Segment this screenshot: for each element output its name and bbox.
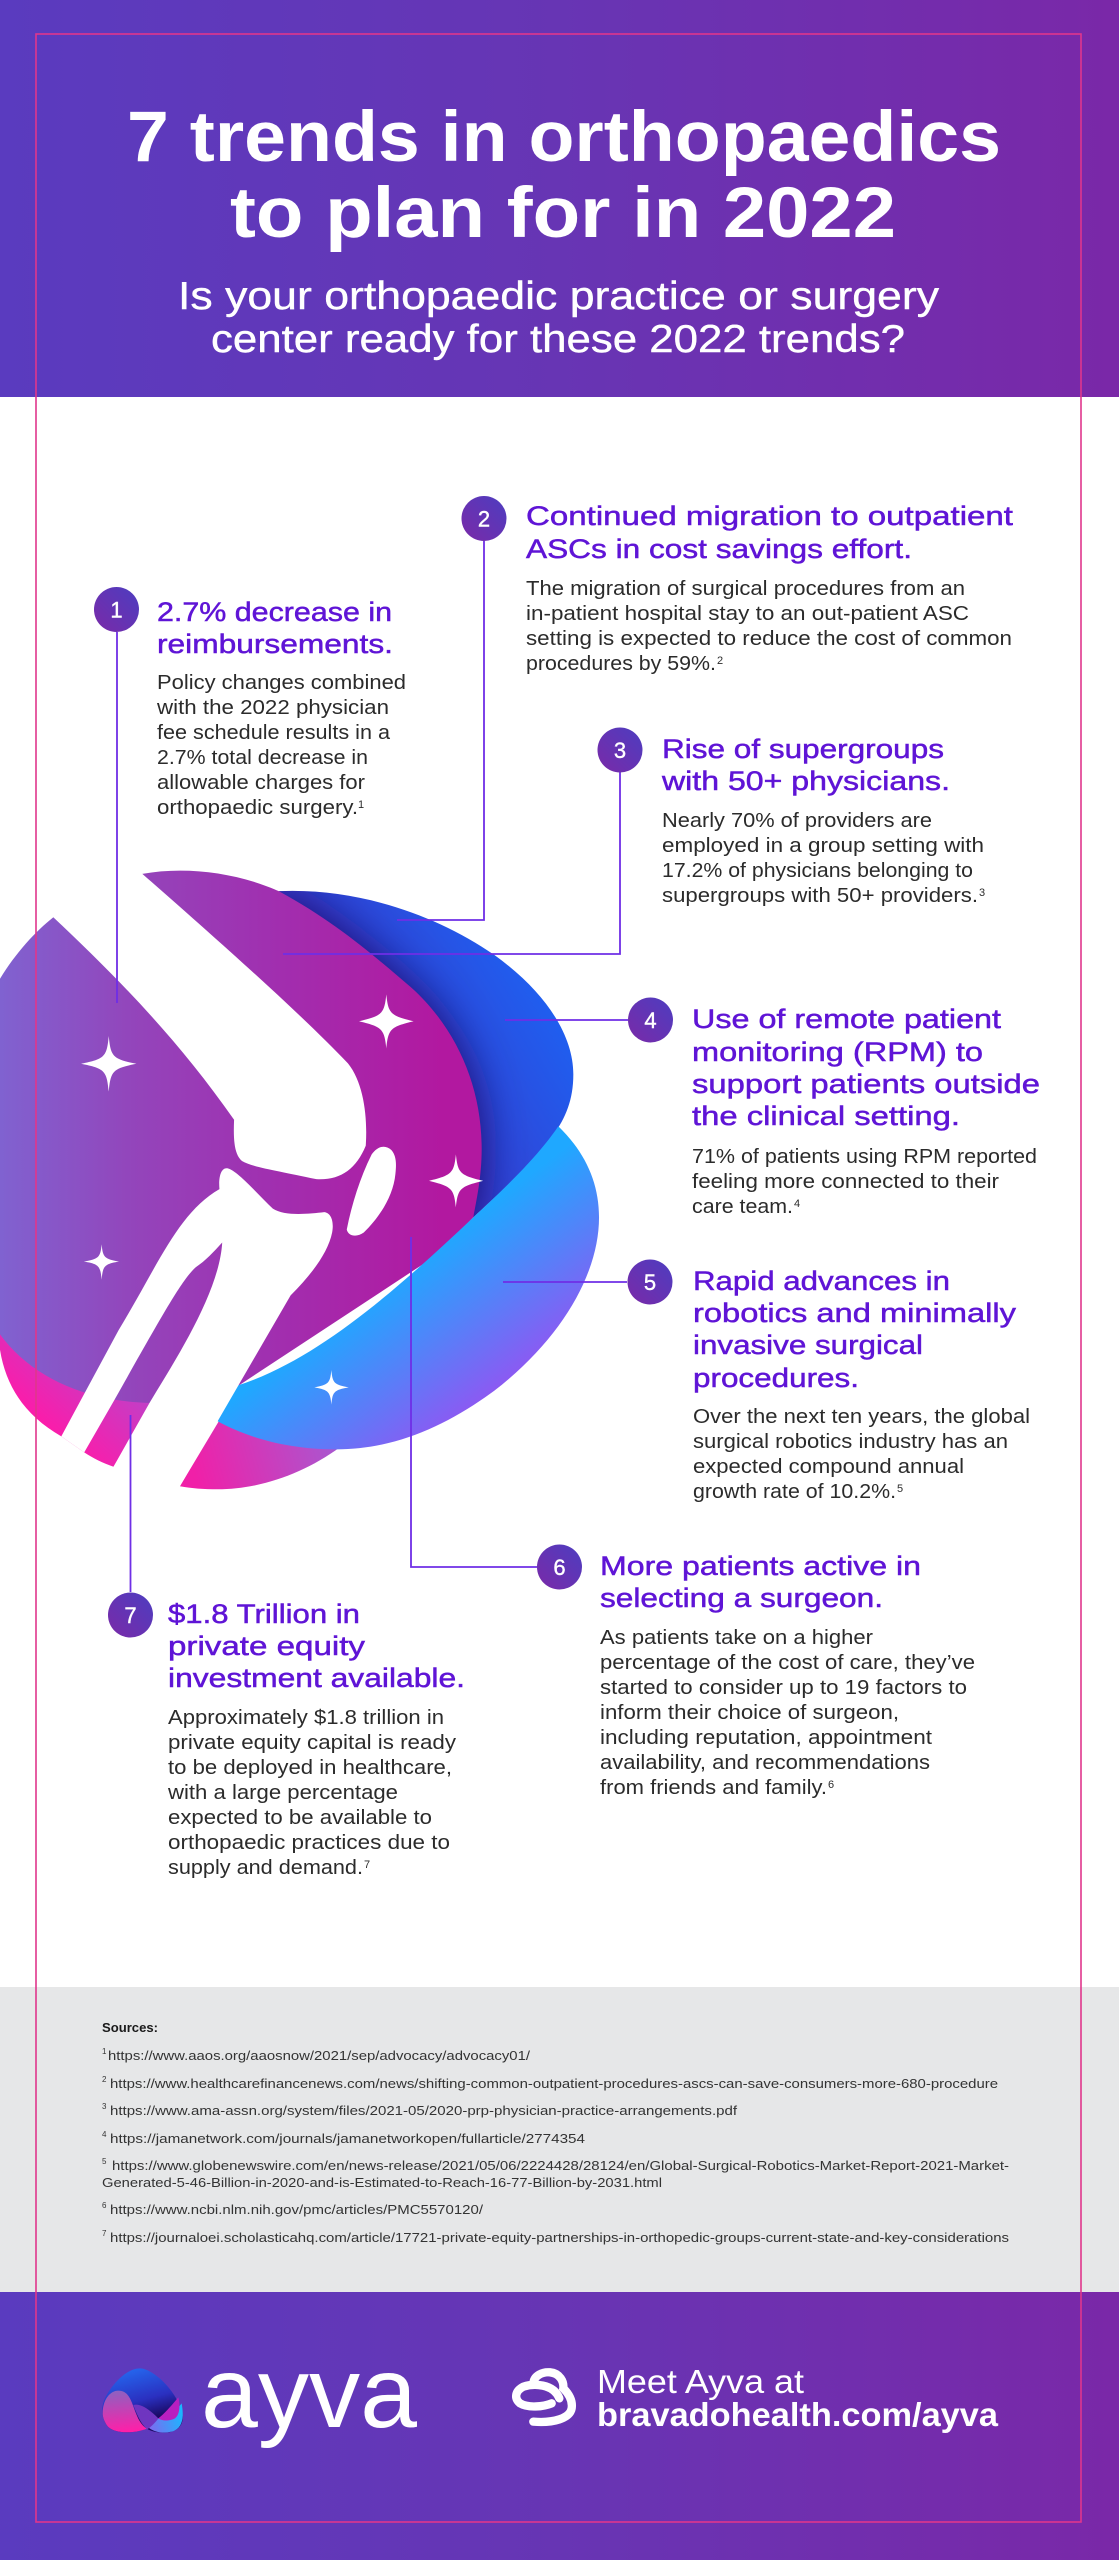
body 3: supergroups with 50+ providers. — [662, 885, 978, 907]
source list: https://journaloei.scholasticahq.com/article/17721-private-equity-partnerships-in-orthopedic-groups-current-state-and-key-considerations — [110, 2230, 1010, 2245]
body 7: 7 — [364, 1859, 370, 1871]
heading 4 — [692, 1004, 1040, 1131]
title: 7 trends in orthopaedics — [127, 98, 1001, 177]
heading 7: $1.8 Trillion in — [168, 1599, 360, 1629]
heading 1: 2.7% decrease in — [157, 597, 392, 627]
icon: sparkles — [81, 994, 483, 1405]
body 3: 3 — [979, 887, 985, 899]
source list: 6 — [102, 2201, 107, 2210]
body 6: from friends and family. — [600, 1777, 827, 1799]
body 2: The migration of surgical procedures from an — [526, 578, 965, 600]
number badge 2 — [462, 496, 506, 541]
body 5: growth rate of 10.2%. — [693, 1481, 896, 1503]
call to action: Meet Ayva at — [597, 2363, 804, 2400]
subtitle: Is your orthopaedic practice or surgery — [178, 275, 940, 318]
body 1: fee schedule results in a — [157, 722, 391, 744]
body 7: Approximately $1.8 trillion in — [168, 1707, 444, 1729]
body 7: orthopaedic practices due to — [168, 1832, 450, 1854]
number badge 4: 4 — [644, 1008, 657, 1033]
number badge 1 — [94, 587, 139, 632]
icon: bravado health mark — [516, 2372, 572, 2422]
body 7: to be deployed in healthcare, — [168, 1757, 452, 1779]
number badge 2: 2 — [478, 506, 490, 532]
heading 5: invasive surgical — [693, 1330, 923, 1360]
body 7: supply and demand. — [168, 1857, 363, 1879]
body 5 — [693, 1406, 1030, 1503]
heading 4: Use of remote patient — [692, 1004, 1002, 1034]
panel: trend 4 — [505, 998, 1040, 1218]
body 4: feeling more connected to their — [692, 1171, 999, 1193]
body 1: with the 2022 physician — [156, 697, 389, 719]
heading 6: selecting a surgeon. — [600, 1583, 883, 1613]
body 2: setting is expected to reduce the cost of common — [526, 628, 1012, 650]
subtitle: center ready for these 2022 trends? — [211, 318, 905, 361]
panel: trend 2 — [397, 496, 1014, 920]
body 2: in-patient hospital stay to an out-patient ASC — [526, 603, 969, 625]
heading 2: ASCs in cost savings effort. — [526, 534, 912, 564]
body 2: procedures by 59%. — [526, 653, 716, 675]
heading 3 — [661, 734, 950, 796]
knee illustration — [0, 871, 599, 1489]
heading 2: Continued migration to outpatient — [526, 501, 1014, 531]
heading 4: the clinical setting. — [692, 1101, 960, 1131]
heading 5: Rapid advances in — [693, 1266, 950, 1296]
number badge 5: 5 — [644, 1270, 656, 1295]
body 3: 17.2% of physicians belonging to — [662, 860, 973, 882]
body 1: Policy changes combined — [157, 672, 406, 694]
source list: https://www.healthcarefinancenews.com/news/shifting-common-outpatient-procedures-ascs-can-save-consumers-more-680-procedure — [110, 2076, 998, 2091]
body 1: allowable charges for — [157, 772, 365, 794]
panel: trend 5 — [503, 1260, 1030, 1503]
number badge 7 — [108, 1592, 153, 1638]
tibia and fibula bones — [61, 1168, 333, 1486]
source list: Generated-5-46-Billion-in-2020-and-is-Estimated-to-Reach-16-77-Billion-by-2031.html — [102, 2175, 662, 2190]
panel: footer — [0, 2292, 1119, 2560]
body 4: 4 — [794, 1198, 800, 1210]
number badge 3: 3 — [614, 738, 626, 763]
source list: https://www.aaos.org/aaosnow/2021/sep/advocacy/advocacy01/ — [108, 2048, 530, 2063]
heading 4: monitoring (RPM) to — [692, 1037, 983, 1067]
body 5: Over the next ten years, the global — [693, 1406, 1030, 1428]
body 6: started to consider up to 19 factors to — [600, 1677, 967, 1699]
body 5: expected compound annual — [693, 1456, 964, 1478]
body 1: 2.7% total decrease in — [157, 747, 368, 769]
heading 6: More patients active in — [600, 1551, 921, 1581]
number badge 6: 6 — [553, 1555, 566, 1580]
heading 3: Rise of supergroups — [662, 734, 944, 764]
body 3: employed in a group setting with — [662, 835, 984, 857]
heading 7 — [168, 1599, 465, 1693]
panel: header — [0, 0, 1119, 397]
body 7: expected to be available to — [168, 1807, 432, 1829]
heading 5: procedures. — [693, 1363, 859, 1393]
source list: https://www.ama-assn.org/system/files/2021-05/2020-prp-physician-practice-arrangements.pdf — [110, 2103, 737, 2118]
heading 2 — [526, 501, 1014, 564]
body 5: surgical robotics industry has an — [693, 1431, 1008, 1453]
body 1: orthopaedic surgery. — [157, 797, 358, 819]
body 6 — [600, 1627, 975, 1799]
subtitle — [178, 275, 940, 361]
source list: 5 — [102, 2157, 107, 2166]
ayva wordmark: ayva — [201, 2337, 417, 2449]
body 6: inform their choice of surgeon, — [600, 1702, 899, 1724]
body 2 — [526, 578, 1012, 675]
patella bone — [347, 1147, 396, 1236]
heading 1: reimbursements. — [157, 629, 393, 659]
source list: 2 — [102, 2075, 107, 2084]
panel: sources — [0, 1987, 1119, 2292]
source list: https://www.globenewswire.com/en/news-release/2021/05/06/2224428/28124/en/Global-Surgical-Robotics-Market-Report-2021-Market- — [112, 2158, 1009, 2173]
number badge 5 — [628, 1260, 672, 1304]
femur bone — [53, 874, 366, 1179]
panel: trend 6 — [411, 1237, 975, 1799]
body 6: including reputation, appointment — [600, 1727, 932, 1749]
title — [127, 98, 1001, 253]
body 7: private equity capital is ready — [168, 1732, 456, 1754]
source list: 3 — [102, 2102, 107, 2111]
number badge 6 — [537, 1544, 582, 1590]
icon: ayva drop logo — [102, 2368, 183, 2433]
heading 4: support patients outside — [692, 1069, 1040, 1099]
body 3: Nearly 70% of providers are — [662, 810, 932, 832]
body 7 — [167, 1707, 456, 1879]
source list: 4 — [102, 2130, 107, 2139]
source list — [102, 2047, 1010, 2245]
body 5: 5 — [897, 1483, 903, 1495]
heading 3: with 50+ physicians. — [661, 766, 950, 796]
panel: trend 7 — [108, 1415, 465, 1879]
body 4: care team. — [692, 1196, 793, 1218]
source list: https://www.ncbi.nlm.nih.gov/pmc/articles/PMC5570120/ — [110, 2202, 483, 2217]
heading 5: robotics and minimally — [693, 1298, 1017, 1328]
call to action — [597, 2363, 999, 2433]
source list: https://jamanetwork.com/journals/jamanetworkopen/fullarticle/2774354 — [110, 2131, 585, 2146]
sources heading: Sources: — [102, 2020, 158, 2035]
call to action: bravadohealth.com/ayva — [597, 2396, 999, 2433]
number badge 3 — [598, 728, 642, 772]
body 7: with a large percentage — [167, 1782, 398, 1804]
heading 7: private equity — [168, 1631, 366, 1661]
body 2: 2 — [717, 655, 723, 667]
panel: trend 3 — [283, 728, 985, 954]
body 3 — [662, 810, 985, 907]
heading 7: investment available. — [168, 1663, 465, 1693]
body 1 — [156, 672, 406, 819]
body 6: 6 — [828, 1779, 834, 1791]
number badge 7: 7 — [124, 1603, 137, 1628]
body 6: availability, and recommendations — [600, 1752, 930, 1774]
body 1: 1 — [358, 799, 364, 811]
title: to plan for in 2022 — [230, 174, 896, 253]
body 6: As patients take on a higher — [600, 1627, 873, 1649]
number badge 4 — [628, 998, 673, 1042]
heading 1 — [157, 597, 393, 659]
source list: 1 — [102, 2047, 107, 2056]
heading 6 — [600, 1551, 921, 1613]
heading 5 — [693, 1266, 1017, 1393]
number badge 1: 1 — [110, 598, 123, 622]
body 4: 71% of patients using RPM reported — [692, 1146, 1037, 1168]
body 6: percentage of the cost of care, they’ve — [600, 1652, 975, 1674]
source list: 7 — [102, 2229, 107, 2238]
body 4 — [692, 1146, 1037, 1218]
panel: trend 1 — [94, 587, 406, 1003]
